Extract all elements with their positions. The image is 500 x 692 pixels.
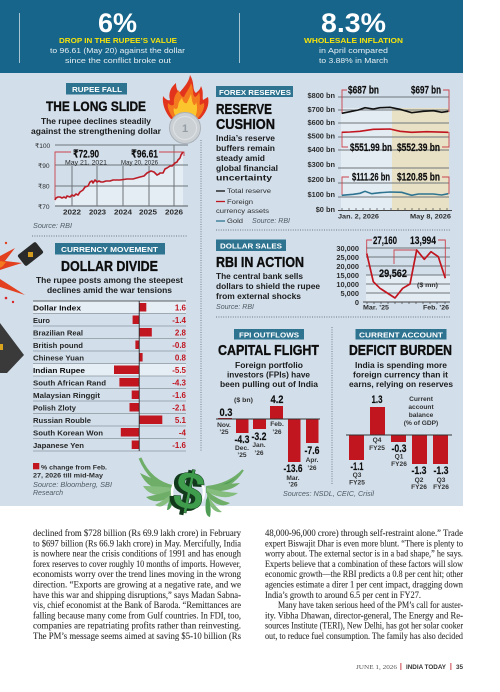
bar chart: current account balance: -1.3	[434, 465, 448, 477]
table: currency change bars: Chinese Yuan	[33, 354, 84, 362]
source: RBI: Source: RBI	[33, 221, 72, 230]
icon: winged dollar: $	[165, 460, 207, 525]
text: article right column	[265, 528, 463, 641]
badge: rupee fall	[66, 83, 127, 94]
text: article right column: Experts believe that a combination of these factors will slow	[265, 559, 463, 569]
text: current account description	[349, 361, 454, 389]
text: rupee fall subhead: against the strengthening dollar	[31, 127, 161, 136]
heading: dollar divide: DOLLAR DIVIDE	[61, 259, 158, 275]
icon: winged dollar: $	[168, 459, 210, 524]
line chart: forex reserves: $551.99 bn	[350, 142, 392, 154]
text: article left column: is nowhere near the crisis conditions of 1991 and has enough	[33, 549, 241, 559]
text: dollar sales description	[216, 272, 321, 311]
line chart: forex reserves: $697 bn	[411, 84, 441, 96]
table: currency change bars: -4.3	[172, 378, 187, 388]
line chart: rupee vs dollar: 2024	[114, 208, 133, 216]
stat: rupee drop: DROP IN THE RUPEE’S VALUE	[59, 36, 177, 45]
line chart: rupee vs dollar: 2023	[89, 208, 106, 216]
line chart: dollar sales: 20,000	[336, 262, 359, 271]
text: article right column: ity. Vibha Dhawan, director-general, The Energy and Re-	[265, 610, 463, 620]
bar chart: FPI flows: -13.6	[284, 463, 302, 475]
table: currency change bars: -2.1	[172, 404, 187, 412]
bar chart: FPI flows	[216, 394, 320, 488]
legend: reserve series: Gold	[227, 218, 243, 225]
line chart: forex reserves: $552.39 bn	[397, 142, 440, 154]
table: currency change bars: -1.6	[172, 441, 187, 450]
footer: page line: JUNE 1, 2026	[356, 664, 397, 671]
legend and source: currency table: % change from Feb.	[41, 464, 107, 472]
line chart: rupee vs dollar: 2026	[165, 208, 183, 216]
heading: reserve cushion	[216, 101, 275, 133]
text: forex description: global financial	[216, 164, 278, 173]
text: FPI description: Foreign portfolio	[235, 361, 303, 370]
table: currency change bars: South Korean Won	[33, 428, 103, 438]
source: NSDL CEIC Crisil: Sources: NSDL, CEIC, Crisil	[283, 489, 374, 498]
table: currency change bars: -5.5	[172, 366, 187, 375]
bar chart: FPI flows: 0.3	[220, 407, 232, 419]
line chart: rupee vs dollar: ₹80	[38, 184, 50, 190]
text: article left column	[33, 528, 241, 641]
bar chart: current account balance: Q3	[353, 472, 362, 479]
line chart: forex reserves: $100 bn	[307, 190, 335, 199]
table: currency change bars: 0.8	[175, 354, 187, 362]
table: currency change bars: Malaysian Ringgit	[33, 391, 100, 400]
table: currency change bars: -0.8	[172, 341, 187, 350]
bar chart: FPI flows: ’26	[272, 429, 282, 436]
bar chart: FPI flows: Apr.	[306, 457, 319, 464]
line chart: forex reserves: Jan. 2, 2026	[338, 214, 379, 220]
heading: reserve cushion: RESERVE	[216, 101, 272, 118]
bar chart: current account balance: FY25	[349, 480, 365, 486]
bar chart: current account balance: (% of GDP)	[404, 420, 438, 427]
table: currency change bars: Euro	[33, 316, 50, 325]
panel: FPI outflows	[216, 329, 320, 488]
line chart: dollar sales: 13,994	[410, 235, 437, 247]
text: FPI description: investors (FPIs) have	[227, 370, 311, 380]
table: currency change bars: Dollar Index	[33, 304, 82, 312]
line chart: dollar sales: 10,000	[336, 280, 359, 289]
bar chart: FPI flows: -4.3	[234, 434, 250, 446]
bar chart: current account balance	[346, 394, 452, 491]
line chart: rupee vs dollar: ₹72.90	[73, 148, 99, 160]
table: currency change bars: -1.4	[172, 316, 187, 325]
text: article left column: have this war and shipping disruptions,” says Madan Sabna-	[33, 590, 241, 600]
text: article right column: expert Biswajit Dhar is even more blunt. “There is plenty to	[265, 538, 463, 548]
table: currency change bars: Brazilian Real	[33, 328, 83, 338]
panel: dollar sales	[216, 235, 450, 312]
bar chart: FPI flows: Dec.	[235, 445, 249, 452]
bar chart: FPI flows: Nov.	[217, 422, 231, 429]
line chart: forex reserves: $700 bn	[307, 105, 335, 114]
bar chart: FPI flows: 4.2	[270, 394, 284, 406]
line chart: forex reserves: $300 bn	[307, 160, 335, 169]
bar chart: current account balance: account	[408, 404, 434, 411]
text: article right column: worry about. The external sector is in a bad shape,” he says.	[265, 549, 463, 559]
line chart: forex reserves: $800 bn	[307, 91, 335, 100]
icon: winged dollar	[140, 458, 243, 525]
text: forex description	[216, 134, 278, 182]
line chart: dollar sales: 30,000	[336, 244, 359, 253]
text: article right column: out, to reduce fuel consumption. The family has also decided	[265, 631, 463, 641]
text: dollar sales description: The central bank sells	[216, 272, 304, 281]
badge: FPI outflows: FPI OUTFLOWS	[239, 330, 299, 340]
text: rupee fall subhead: The rupee declines steadily	[41, 117, 152, 126]
bar chart: FPI flows: -3.2	[252, 431, 266, 443]
text: article left column: companies are repatriating profits rather than reinvesting.	[33, 621, 241, 631]
bar chart: FPI flows: Jan.	[252, 442, 266, 449]
stat: rupee drop: 6%	[98, 8, 137, 38]
icon: burning rupee coin: 1	[182, 123, 188, 135]
text: FPI description: been pulling out of India	[220, 380, 319, 389]
line chart: dollar sales: 27,160	[373, 235, 397, 247]
table: currency change bars: 5.1	[175, 416, 187, 425]
bar chart: FPI flows: ’26	[254, 450, 264, 457]
footer: page line: 35	[456, 664, 463, 671]
bar chart: FPI flows: ’25	[219, 429, 229, 436]
panel: currency movement	[33, 243, 187, 497]
footer: page line	[356, 663, 463, 671]
stat: wholesale inflation: WHOLESALE INFLATION	[304, 36, 403, 45]
text: article left column: to $697 billion (Rs 66.9 lakh crore) in May. Mercifully, India	[33, 538, 241, 548]
text: rupee fall subhead	[31, 117, 161, 136]
text: article left column: falling because many come from Gulf countries. In FDI, too,	[33, 610, 241, 620]
text: current account description: India is spending more	[355, 361, 448, 370]
text: article right column: 48,000-96,000 crore) through self-restraint alone.” Trade	[265, 528, 463, 538]
table: currency change bars: -1.6	[172, 391, 187, 400]
bar chart: FPI flows: ($ bn)	[234, 397, 253, 404]
badge: FPI outflows	[234, 329, 304, 340]
bar chart: current account balance: -1.1	[350, 461, 364, 473]
line chart: forex reserves: $120.85 bn	[397, 172, 440, 184]
heading: deficit burden: DEFICIT BURDEN	[349, 343, 452, 359]
stat: wholesale inflation: to 3.88% in March	[319, 56, 388, 65]
text: currency subhead: The rupee posts among the steepest	[36, 276, 183, 285]
text: dollar sales description: from external shocks	[216, 292, 302, 301]
legend: reserve series: Source: RBI	[252, 216, 290, 225]
text: article left column: vis, chief economist at the Bank of Baroda. “Remittances are	[33, 600, 241, 610]
stat: wholesale inflation	[304, 8, 403, 65]
text: article left column: The PM’s message seems aimed at saving $5-10 billion (Rs	[33, 631, 241, 641]
table: currency change bars: Japanese Yen	[33, 441, 84, 450]
heading: reserve cushion: CUSHION	[216, 116, 275, 133]
line chart: rupee vs dollar: ₹90	[38, 163, 50, 170]
table: currency change bars	[33, 301, 187, 451]
line chart: forex reserves: $400 bn	[307, 145, 335, 154]
bar chart: current account balance: Current	[409, 396, 434, 403]
table: currency change bars: 1.6	[175, 304, 187, 312]
table: currency change bars: 2.8	[175, 328, 187, 338]
bar chart: current account balance: Q3	[437, 477, 446, 484]
line chart: dollar sales: Mar. ’25	[363, 304, 389, 312]
text: currency subhead: declines amid the war tensions	[47, 286, 173, 295]
text: article left column: declined from $728 billion (Rs 69.9 lakh crore) in February	[33, 528, 241, 538]
line chart: forex reserves: $687 bn	[348, 84, 379, 96]
line chart: dollar sales: 25,000	[336, 253, 359, 262]
line chart: dollar sales	[336, 235, 450, 312]
line chart: rupee vs dollar: May 21, 2021	[65, 160, 107, 166]
text: forex description: uncertainty	[216, 174, 273, 182]
bar chart: current account balance: -0.3	[392, 443, 406, 455]
panel: forex reserves	[216, 84, 452, 225]
text: dollar sales description: Source: RBI	[216, 302, 254, 311]
bar chart: FPI flows: ’26	[307, 465, 317, 472]
table: currency change bars: Russian Rouble	[33, 416, 91, 425]
line chart: rupee vs dollar: May 20, 2026	[121, 160, 158, 166]
line chart: dollar sales: Feb. ’26	[423, 304, 449, 312]
line chart: forex reserves: May 8, 2026	[410, 214, 451, 220]
line chart: rupee vs dollar: 2022	[63, 208, 81, 216]
bar chart: current account balance: Q2	[415, 477, 424, 484]
heading: RBI in action: RBI IN ACTION	[216, 254, 304, 271]
table: currency change bars: -4	[179, 428, 187, 438]
bar chart: current account balance: -1.3	[412, 465, 426, 477]
legend and source: currency table	[33, 463, 112, 497]
text: forex description: India’s reserve	[216, 134, 276, 143]
text: dollar sales description: dollars to shield the rupee	[216, 282, 321, 291]
badge: forex reserves: FOREX RESERVES	[219, 88, 291, 97]
legend: reserve series: Foreign	[227, 199, 253, 206]
text: current account description: earns, relying on reserves	[349, 380, 454, 389]
bar chart: FPI flows: Mar.	[286, 475, 300, 482]
line chart: rupee vs dollar: ₹70	[38, 204, 50, 211]
text: article right column: economic growth—the RBI predicts a 0.8 per cent hit; other	[265, 569, 463, 579]
stat: rupee drop	[50, 8, 186, 65]
heading: capital flight: CAPITAL FLIGHT	[218, 343, 319, 359]
line chart: dollar sales: 5,000	[340, 289, 359, 298]
line chart: forex reserves: $200 bn	[307, 175, 335, 184]
panel: header band	[0, 0, 463, 73]
bar chart: current account balance: FY26	[433, 484, 449, 491]
line chart: forex reserves: $600 bn	[307, 118, 335, 127]
bar chart: current account balance: balance	[409, 412, 434, 419]
bar chart: current account balance: Q1	[395, 454, 404, 460]
legend and source: currency table: 27, 2026 till mid-May	[33, 472, 103, 480]
icon: oil barrels and explosion	[0, 241, 44, 373]
text: article right column: India’s growth to around 6.5 per cent in FY27.	[265, 590, 421, 600]
line chart: rupee vs dollar: 2025	[139, 208, 157, 216]
line chart: rupee vs dollar	[35, 143, 188, 216]
panel: infographic background	[0, 73, 463, 506]
table: currency change bars: Polish Zloty	[33, 404, 77, 412]
legend and source: currency table: Source: Bloomberg, SBI	[33, 480, 112, 489]
legend: reserve series	[216, 188, 290, 225]
bar chart: current account balance: FY25	[369, 445, 385, 452]
stat: rupee drop: since the conflict broke out	[65, 56, 172, 65]
line chart: rupee vs dollar: ₹96.61	[131, 148, 158, 160]
text: article right column: agencies estimate a direr 1 per cent impact, dragging down	[265, 580, 463, 590]
text: article right column: sources Institute (TERI), New Delhi, has got her solar cooker	[265, 621, 463, 631]
legend: reserve series: Total reserve	[227, 188, 271, 195]
bar chart: current account balance: FY26	[411, 484, 427, 491]
bar chart: FPI flows: -7.6	[304, 445, 320, 457]
table: currency change bars: Indian Rupee	[33, 366, 85, 375]
line chart: dollar sales: ($ mn)	[417, 282, 438, 289]
bar chart: current account balance: FY26	[391, 461, 407, 468]
line chart: forex reserves	[307, 84, 452, 220]
text: FPI description	[220, 361, 319, 389]
text: article left column: direction. “Exports are growing at a negative rate, and we	[33, 580, 241, 590]
line chart: dollar sales: 29,562	[379, 268, 407, 280]
legend: reserve series: currency assets	[216, 208, 270, 215]
badge: dollar sales	[216, 240, 286, 251]
table: currency change bars: British pound	[33, 341, 83, 350]
legend and source: currency table: Research	[33, 488, 63, 497]
divider lines	[32, 140, 450, 485]
panel: rupee fall	[31, 83, 188, 230]
text: currency subhead	[36, 276, 183, 295]
text: current account description: foreign currency than it	[353, 370, 448, 380]
line chart: forex reserves: $111.26 bn	[352, 172, 390, 184]
panel: current account	[283, 329, 454, 498]
badge: currency movement	[55, 243, 165, 254]
table: currency change bars: South African Rand	[33, 378, 106, 388]
line chart: rupee vs dollar: ₹100	[35, 143, 51, 150]
line chart: dollar sales: 0	[355, 298, 359, 307]
text: forex description: buffers remain	[216, 144, 275, 153]
stat: rupee drop: to 96.61 (May 20) against the dollar	[50, 46, 186, 55]
bar chart: FPI flows: Feb.	[270, 421, 284, 428]
badge: rupee fall: RUPEE FALL	[72, 85, 122, 94]
bar chart: FPI flows: ’25	[237, 452, 247, 459]
bar chart: FPI flows: ’26	[288, 482, 298, 488]
line chart: dollar sales: 15,000	[336, 271, 359, 280]
bar chart: current account balance: Q4	[373, 437, 382, 444]
icon: burning rupee coin	[163, 75, 208, 144]
text: article left column: economists worry over the trend lines moving in the wrong	[33, 569, 241, 579]
line chart: forex reserves: $0 bn	[316, 205, 335, 214]
badge: dollar sales: DOLLAR SALES	[220, 242, 282, 250]
text: article left column: forex reserves to cover roughly 10 months of imports. However,	[33, 559, 241, 569]
stat: wholesale inflation: 8.3%	[321, 8, 386, 38]
bar chart: current account balance: 1.3	[372, 394, 382, 406]
text: forex description: steady amid	[216, 154, 265, 163]
footer: page line: INDIA TODAY	[406, 664, 447, 671]
text: article right column: Many have taken serious heed of the PM’s call for auster-	[278, 600, 463, 610]
line chart: forex reserves: $500 bn	[307, 132, 335, 140]
heading: the long slide: THE LONG SLIDE	[46, 98, 146, 114]
badge: currency movement: CURRENCY MOVEMENT	[61, 245, 158, 254]
badge: current account: CURRENT ACCOUNT	[359, 330, 444, 340]
stat: wholesale inflation: in April compared	[319, 46, 388, 55]
